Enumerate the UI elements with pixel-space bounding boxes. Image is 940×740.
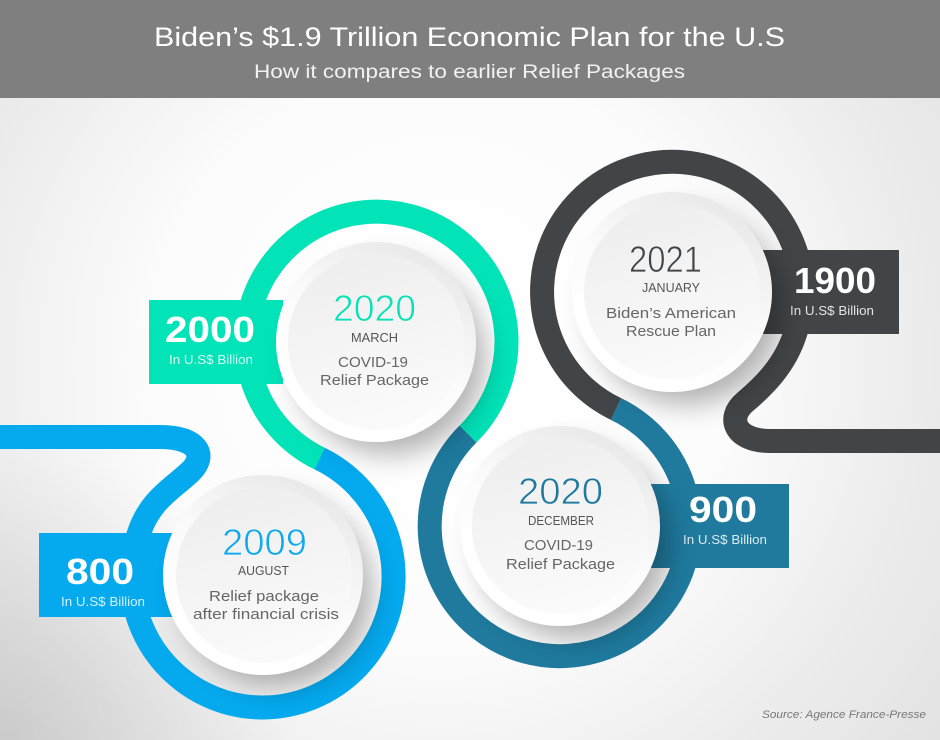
disc: 2020 December: COVID-19: [524, 537, 593, 554]
disc: 2020 March: [276, 242, 485, 454]
disc: 2021 January: JANUARY: [642, 280, 700, 295]
value box: 2000: [149, 300, 283, 384]
value box: 900: 900: [689, 489, 757, 530]
value box: 900: In U.S$ Billion: [683, 532, 767, 547]
disc: 2020 March: Relief Package: [320, 372, 429, 389]
disc: 2021 January: 2021: [629, 239, 702, 280]
disc: 2009 August: Relief package: [209, 588, 319, 605]
disc: 2021 January: Biden’s American: [606, 305, 736, 322]
disc: 2009 August: 2009: [222, 522, 307, 563]
disc: 2020 March: 2020: [333, 288, 416, 329]
title: Biden’s $1.9 Trillion Economic Plan for the U.S: [154, 22, 785, 52]
value box: 1900: In U.S$ Billion: [790, 303, 874, 318]
disc: 2009 August: AUGUST: [238, 563, 289, 578]
disc: 2021 January: Rescue Plan: [626, 323, 716, 340]
disc: 2020 March: COVID-19: [338, 354, 408, 371]
disc: 2020 December: DECEMBER: [528, 513, 594, 528]
source note: Source: Agence France-Presse: [762, 709, 926, 721]
value box: 1900: [763, 250, 899, 334]
header band: [0, 0, 940, 98]
disc: 2009 August: after financial crisis: [193, 606, 339, 623]
timeline path: 2021 dark grey: [542, 162, 940, 441]
subtitle: How it compares to earlier Relief Packages: [254, 62, 685, 83]
disc: 2009 August: [163, 475, 372, 687]
disc: 2021 January: [572, 192, 781, 404]
disc: 2020 December: Relief Package: [506, 556, 615, 573]
disc: 2020 December: [460, 426, 669, 638]
value box: 2000: In U.S$ Billion: [169, 352, 253, 367]
value box: 1900: 1900: [794, 260, 876, 301]
disc: 2020 December: 2020: [518, 471, 603, 512]
timeline path: 2020 December dark blue: [430, 409, 690, 656]
timeline path: 2009 blue: [0, 437, 394, 707]
value box: 800: 800: [66, 551, 134, 592]
value box: 800: [39, 533, 173, 617]
timeline path: 2020 March teal: [246, 212, 506, 458]
value box: 800: In U.S$ Billion: [61, 594, 145, 609]
value box: 900: [651, 484, 789, 568]
disc: 2020 March: MARCH: [351, 330, 398, 345]
value box: 2000: 2000: [165, 309, 255, 350]
